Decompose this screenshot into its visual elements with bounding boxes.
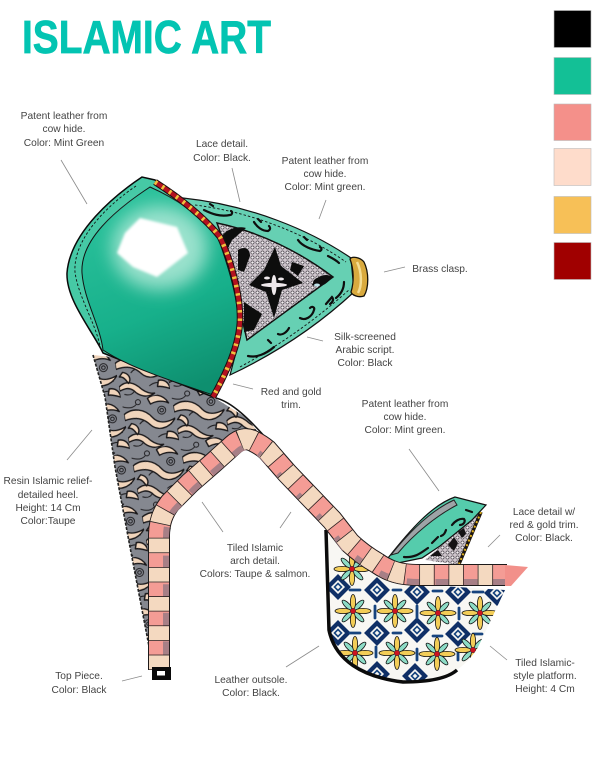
- swatch: mint green: [554, 58, 591, 94]
- shoe: top piece: [152, 667, 171, 680]
- label: tiled arch: arch detail.: [230, 556, 280, 567]
- label: silk-screened script: Color: Black: [338, 358, 393, 369]
- label: resin heel: Resin Islamic relief-: [4, 476, 92, 487]
- shoe: heel relief: [93, 355, 266, 662]
- label: red and gold trim: [233, 384, 322, 411]
- label: patent leather strap: Color: Mint green.: [285, 182, 365, 193]
- label: brass clasp: [384, 264, 468, 275]
- label: lace detail front: Color: Black.: [515, 533, 573, 544]
- label: brass clasp: Brass clasp.: [412, 264, 468, 275]
- label: resin heel: [4, 430, 92, 527]
- label: patent leather front strap: Color: Mint green.: [365, 425, 445, 436]
- label: red and gold trim: Red and gold: [261, 387, 322, 398]
- label: tiled platform: style platform.: [513, 671, 577, 682]
- label: patent leather toe: cow hide.: [42, 124, 86, 135]
- label: leather outsole: Leather outsole.: [214, 675, 288, 686]
- label: patent leather front strap: Patent leather from: [362, 399, 448, 410]
- label: tiled platform: Height: 4 Cm: [515, 684, 575, 695]
- swatch: salmon: [554, 104, 591, 140]
- swatch: gold: [554, 196, 591, 234]
- red and gold trim: [155, 182, 240, 397]
- lace panel: [217, 223, 333, 340]
- colour palette: [554, 10, 591, 280]
- label: lace detail front: Lace detail w/: [513, 507, 575, 518]
- label: patent leather toe: Patent leather from: [21, 111, 107, 122]
- shoe: brass clasp: [350, 257, 368, 297]
- label: patent leather strap: Patent leather from: [282, 156, 368, 167]
- shoe: front strap with lace: [388, 497, 486, 565]
- label: patent leather toe: Color: Mint Green: [24, 138, 104, 149]
- label: leather outsole: Color: Black.: [222, 688, 280, 699]
- label: lace detail front: [488, 507, 579, 547]
- label: tiled arch: Colors: Taupe & salmon.: [200, 569, 310, 580]
- label: patent leather toe: [21, 111, 107, 204]
- shoe: tiled platform: [326, 530, 507, 686]
- title: ISLAMIC ART: [22, 11, 271, 63]
- label: tiled platform: Tiled Islamic-: [515, 658, 575, 669]
- label: lace detail front: red & gold trim.: [509, 520, 579, 531]
- mint strap: [388, 497, 486, 563]
- label: resin heel: Color:Taupe: [21, 516, 76, 527]
- shoe: toe bubble: [67, 177, 240, 397]
- label: patent leather front strap: cow hide.: [383, 412, 427, 423]
- label: resin heel: Height: 14 Cm: [15, 503, 81, 514]
- label: lace detail: Color: Black.: [193, 153, 251, 164]
- label: leather outsole: [214, 646, 319, 699]
- label: lace detail: Lace detail.: [196, 139, 248, 150]
- swatch: dark red: [554, 242, 591, 280]
- label: silk-screened script: Arabic script.: [336, 345, 394, 356]
- label: tiled arch: Tiled Islamic: [227, 543, 283, 554]
- label: patent leather front strap: [362, 399, 448, 491]
- label: resin heel: detailed heel.: [18, 490, 78, 501]
- label: silk-screened script: Silk-screened: [334, 332, 396, 343]
- label: silk-screened script: [307, 332, 396, 369]
- label: tiled platform: [490, 646, 577, 695]
- arabic script: [204, 204, 344, 357]
- lace panel: [425, 512, 480, 565]
- lace motif: [222, 227, 332, 332]
- label: top piece: Color: Black: [52, 685, 107, 696]
- label: patent leather strap: [282, 156, 368, 219]
- label: top piece: Top Piece.: [55, 671, 103, 682]
- label: tiled arch: [200, 502, 310, 580]
- shoe: upper strap with silk-screened script: [183, 198, 354, 375]
- swatch: black: [554, 10, 591, 48]
- shoe: tiled arch: [159, 439, 528, 670]
- label: red and gold trim: trim.: [281, 400, 301, 411]
- swatch: peach: [554, 148, 591, 186]
- label: patent leather strap: cow hide.: [303, 169, 347, 180]
- label: top piece: [52, 671, 142, 696]
- insole: [391, 500, 457, 555]
- highlight: [112, 206, 208, 290]
- label: lace detail: [193, 139, 251, 202]
